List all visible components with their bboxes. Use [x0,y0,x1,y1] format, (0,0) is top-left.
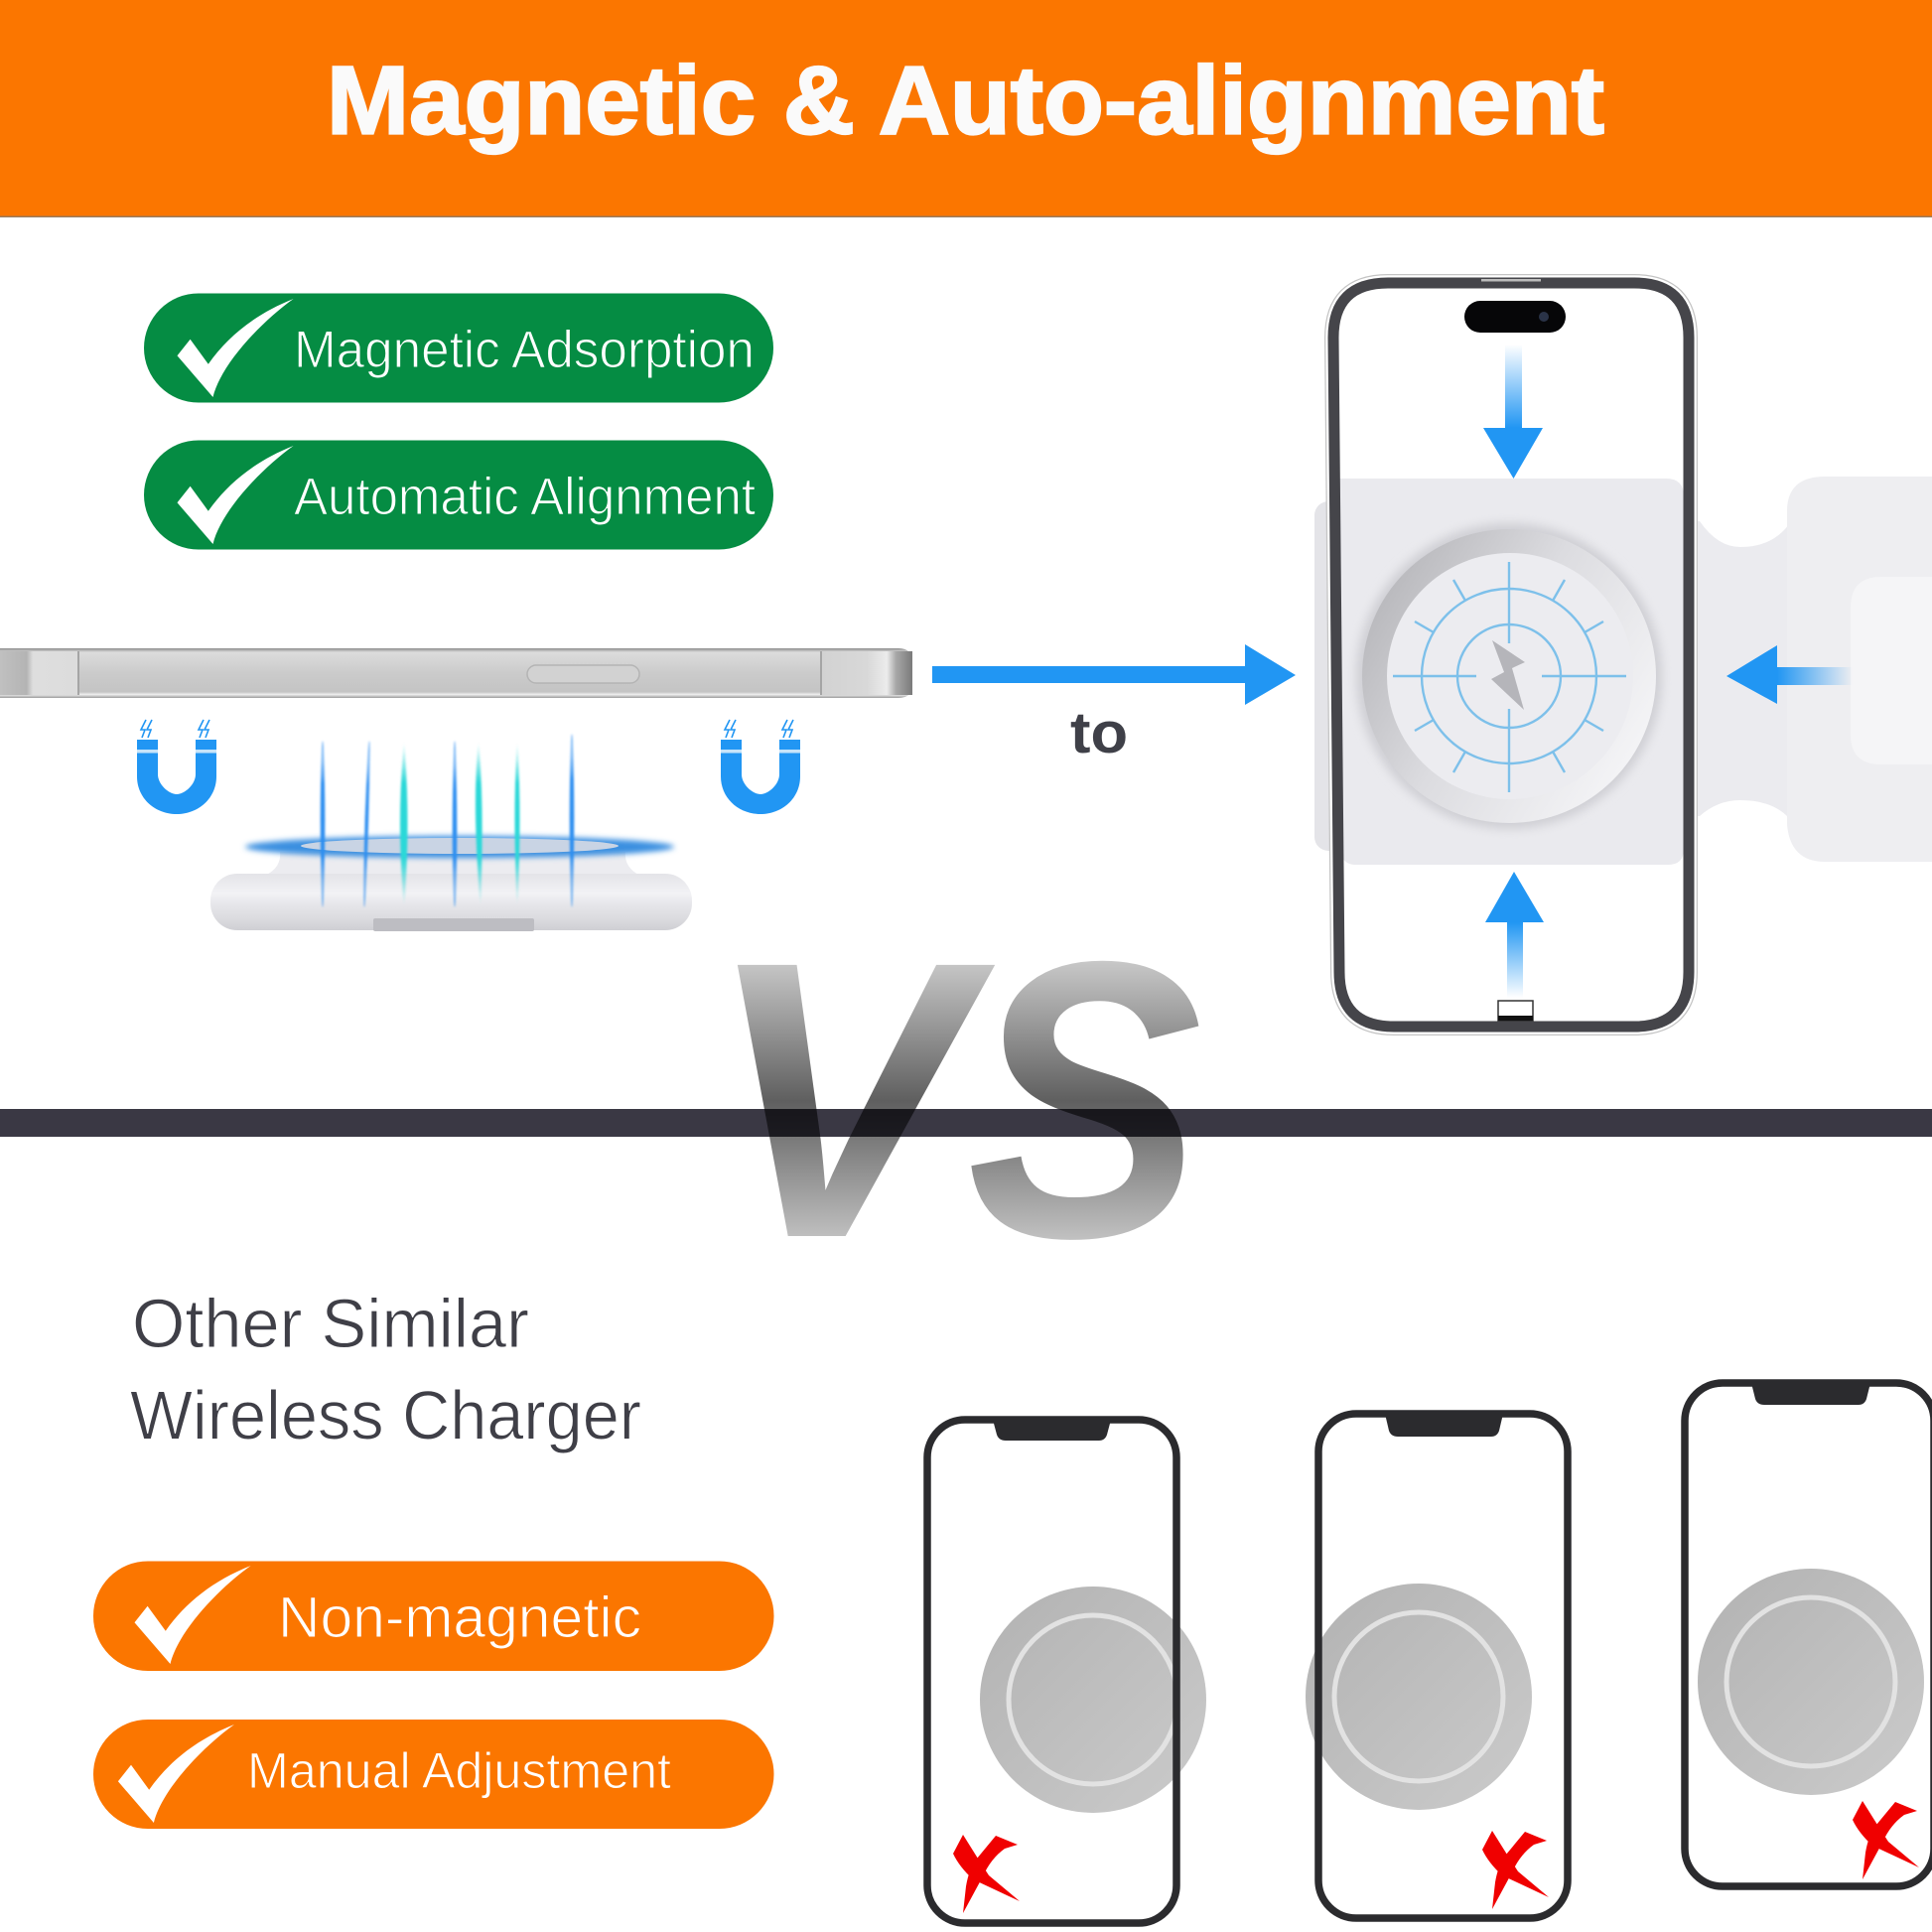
pill: magnetic adsorption [144,294,773,403]
icon: left magnet [137,720,216,814]
notch [993,1420,1111,1441]
phone outline [1318,1414,1568,1918]
icon: check mark [177,299,294,397]
phone bezel [1333,283,1689,1027]
charger disc [1356,523,1662,829]
charger neck [260,852,645,878]
VS heading: S [967,881,1204,1320]
label: to: to [1070,701,1128,765]
label: Non-magnetic [278,1586,641,1650]
VS divider bar [0,1109,1932,1137]
pill: manual adjustment [93,1720,774,1829]
charger square [1339,479,1684,865]
icon: lightning bolt [1491,640,1525,710]
side button [527,665,639,683]
title: Magnetic & Auto-alignment [327,46,1604,155]
charger disc [1698,1569,1924,1795]
arrow: to [932,644,1296,765]
icon: right magnet [721,720,800,814]
charging port [1498,1001,1533,1021]
icon: check mark [177,446,294,544]
charger body [210,874,692,930]
strap [1688,521,1789,818]
red x [953,1835,1020,1913]
pill: automatic alignment [144,441,773,550]
heading: other similar wireless charger [130,1285,641,1453]
alignment target lines [1393,562,1626,792]
misaligned phone 2 [1306,1414,1568,1918]
camera island [1464,301,1566,333]
arrow: bottom [1507,922,1523,998]
arrow: right [1777,667,1853,685]
phone outline [1685,1383,1932,1886]
label: Automatic Alignment [294,468,756,526]
charger disc [1306,1584,1532,1810]
header banner [0,0,1932,217]
notch [1751,1383,1870,1405]
arrow: top [1505,345,1522,428]
icon: check mark [118,1725,234,1823]
field lines [321,735,574,906]
phone outline [927,1420,1176,1923]
heading: other similar wireless charger: Other Similar [132,1285,529,1362]
red x [1482,1831,1549,1909]
label: Manual Adjustment [247,1742,671,1799]
right charger pad [1787,477,1932,862]
magnetic ring [245,836,674,858]
pill: non-magnetic [93,1561,774,1671]
phone side view [0,648,912,698]
misaligned phone 1 [927,1420,1206,1923]
notch [1385,1414,1503,1437]
icon: check mark [135,1566,251,1664]
charger and phone front view [1314,279,1932,1027]
label: Magnetic Adsorption [294,321,755,379]
VS heading [670,880,1204,1320]
VS heading: V [670,880,1016,1319]
rear tab [1314,501,1354,851]
heading: other similar wireless charger: Wireless Charger [130,1376,641,1453]
misaligned phone 3 [1685,1383,1932,1886]
phone screen [1333,283,1689,1027]
charger side view with magnetic field [210,735,692,931]
red x [1853,1801,1919,1879]
charger disc [980,1587,1206,1813]
